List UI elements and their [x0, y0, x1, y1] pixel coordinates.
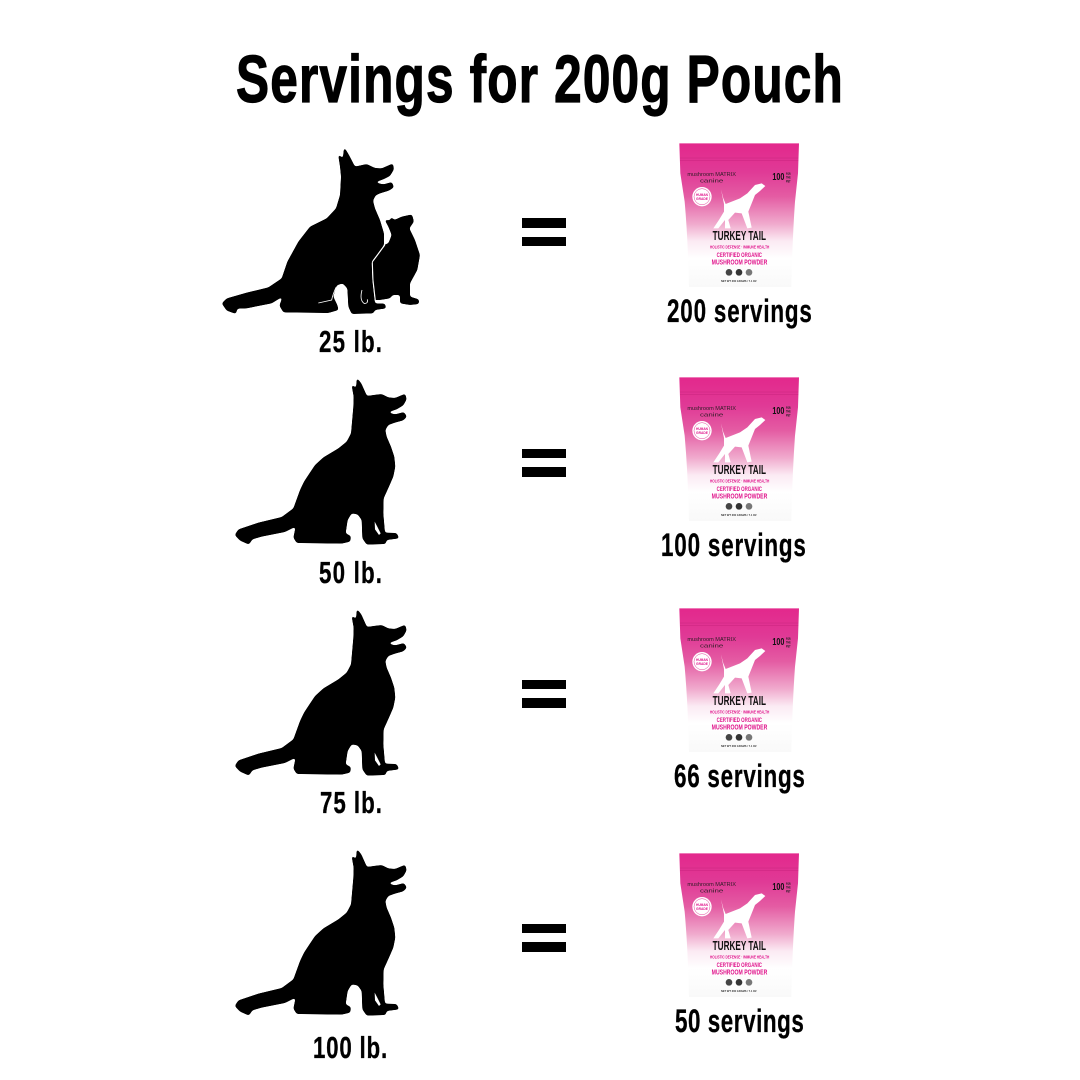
product pouch: 100	[772, 637, 785, 648]
product pouch: PET	[786, 889, 791, 893]
product pouch: NET WT 200 GRAMS / 7.1 OZ	[721, 279, 757, 283]
product pouch: mushroom MATRIX	[687, 882, 736, 888]
product pouch: PET	[786, 179, 791, 183]
product pouch: HUMAN	[696, 193, 708, 197]
equals sign	[522, 924, 566, 952]
product pouch: PET	[786, 644, 791, 648]
product pouch: mushroom MATRIX	[687, 172, 736, 178]
product pouch: TURKEY TAIL	[713, 939, 766, 953]
product pouch: HOLISTIC DEFENSE · IMMUNE HEALTH	[710, 245, 770, 250]
product pouch: THE	[786, 641, 791, 645]
product pouch: NET WT 200 GRAMS / 7.1 OZ	[721, 989, 757, 993]
icon: dog and cat silhouette	[222, 147, 420, 314]
icon: dog silhouette	[235, 377, 407, 545]
product pouch: MUSHROOM POWDER	[712, 722, 768, 731]
servings label: 100 servings	[661, 527, 806, 563]
servings label: 50 servings	[675, 1003, 804, 1039]
product pouch: GRADE	[696, 907, 708, 911]
product pouch: 100	[772, 172, 785, 183]
product pouch: GRADE	[696, 662, 708, 666]
product pouch: mushroom MATRIX	[687, 637, 736, 643]
product pouch: CERTIFIED ORGANIC	[717, 718, 762, 724]
product pouch: canine	[700, 413, 723, 419]
weight label: 100 lb.	[313, 1030, 387, 1065]
product pouch: MUSHROOM POWDER	[712, 257, 768, 266]
product pouch: MUSHROOM POWDER	[712, 967, 768, 976]
equals sign	[522, 218, 566, 246]
row 4: 100 lb.	[235, 848, 804, 1065]
product pouch: GRADE	[696, 197, 708, 201]
equals sign	[522, 449, 566, 477]
weight label: 75 lb.	[320, 785, 382, 820]
product pouch: 100	[772, 406, 785, 417]
product pouch: THE	[786, 176, 791, 180]
product pouch: TURKEY TAIL	[713, 694, 766, 708]
product pouch: HUMAN	[696, 903, 708, 907]
product pouch	[679, 853, 799, 997]
product pouch: HOLISTIC DEFENSE · IMMUNE HEALTH	[710, 955, 770, 960]
servings label: 66 servings	[674, 758, 805, 794]
product pouch: CERTIFIED ORGANIC	[717, 253, 762, 259]
row 3: 75 lb.	[235, 608, 805, 820]
weight label: 50 lb.	[319, 555, 382, 590]
product pouch: canine	[700, 179, 723, 185]
product pouch: MUSHROOM POWDER	[712, 491, 768, 500]
product pouch: TURKEY TAIL	[713, 229, 766, 243]
icon: dog silhouette	[235, 608, 407, 776]
product pouch: HOLISTIC DEFENSE · IMMUNE HEALTH	[710, 710, 770, 715]
weight label: 25 lb.	[319, 324, 382, 359]
product pouch: CERTIFIED ORGANIC	[717, 963, 762, 969]
product pouch: FOR	[786, 172, 791, 176]
product pouch: canine	[700, 889, 723, 895]
product pouch: PET	[786, 413, 791, 417]
product pouch: GRADE	[696, 431, 708, 435]
product pouch: NET WT 200 GRAMS / 7.1 OZ	[721, 744, 757, 748]
servings label: 200 servings	[667, 293, 812, 329]
product pouch: FOR	[786, 882, 791, 886]
product pouch: HUMAN	[696, 427, 708, 431]
equals sign	[522, 680, 566, 708]
product pouch: HUMAN	[696, 658, 708, 662]
product pouch: HOLISTIC DEFENSE · IMMUNE HEALTH	[710, 479, 770, 484]
product pouch	[679, 143, 799, 287]
product pouch: NET WT 200 GRAMS / 7.1 OZ	[721, 513, 757, 517]
product pouch: CERTIFIED ORGANIC	[717, 487, 762, 493]
product pouch: FOR	[786, 406, 791, 410]
product pouch: 100	[772, 882, 785, 893]
product pouch	[679, 608, 799, 752]
product pouch	[679, 377, 799, 521]
product pouch: TURKEY TAIL	[713, 463, 766, 477]
product pouch: THE	[786, 886, 791, 890]
icon: dog silhouette	[235, 848, 407, 1016]
product pouch: mushroom MATRIX	[687, 406, 736, 412]
product pouch: THE	[786, 410, 791, 414]
title: Servings for 200g Pouch	[236, 43, 843, 117]
product pouch: FOR	[786, 637, 791, 641]
product pouch: canine	[700, 644, 723, 650]
row 1: 25 lb.	[222, 143, 812, 359]
row 2: 50 lb.	[235, 377, 806, 590]
